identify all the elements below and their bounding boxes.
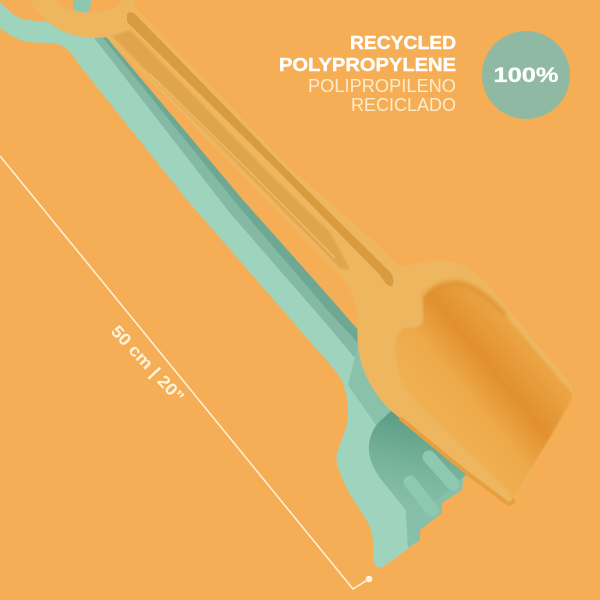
scoop interior	[395, 283, 573, 500]
heading english: RECYCLED	[350, 32, 456, 53]
green rake toy	[0, 0, 467, 567]
scoop lower edge	[400, 418, 514, 504]
shovel handle slot	[127, 12, 393, 286]
rake tooth 2	[429, 457, 453, 484]
rake body	[0, 2, 467, 567]
rake head step wall	[405, 465, 467, 548]
scoop lip shadow	[423, 283, 505, 315]
rake handle top ridge	[100, 34, 360, 345]
measure line	[0, 156, 369, 589]
rake handle mid channel	[88, 30, 365, 370]
rake tooth 1	[410, 482, 432, 510]
handle highlight	[150, 74, 335, 258]
rake head hollow	[369, 408, 466, 519]
heading spanish: POLIPROPILENO	[308, 75, 456, 96]
material text: RECICLADO	[351, 94, 456, 115]
rake inner wall highlight	[348, 345, 392, 425]
material text: POLYPROPYLENE	[279, 54, 456, 75]
yellow shovel toy	[30, 0, 573, 506]
shovel handle tan band	[112, 30, 350, 270]
dimension label: 50 cm | 20”	[107, 322, 188, 406]
measure end dot	[366, 576, 372, 582]
badge value: 100%	[494, 64, 559, 87]
dimension line	[0, 156, 372, 589]
shovel shell	[30, 0, 573, 506]
rake ring fragment	[73, 0, 92, 14]
badge circle	[482, 31, 570, 119]
material text	[279, 32, 456, 115]
badge: 100%	[482, 31, 570, 119]
